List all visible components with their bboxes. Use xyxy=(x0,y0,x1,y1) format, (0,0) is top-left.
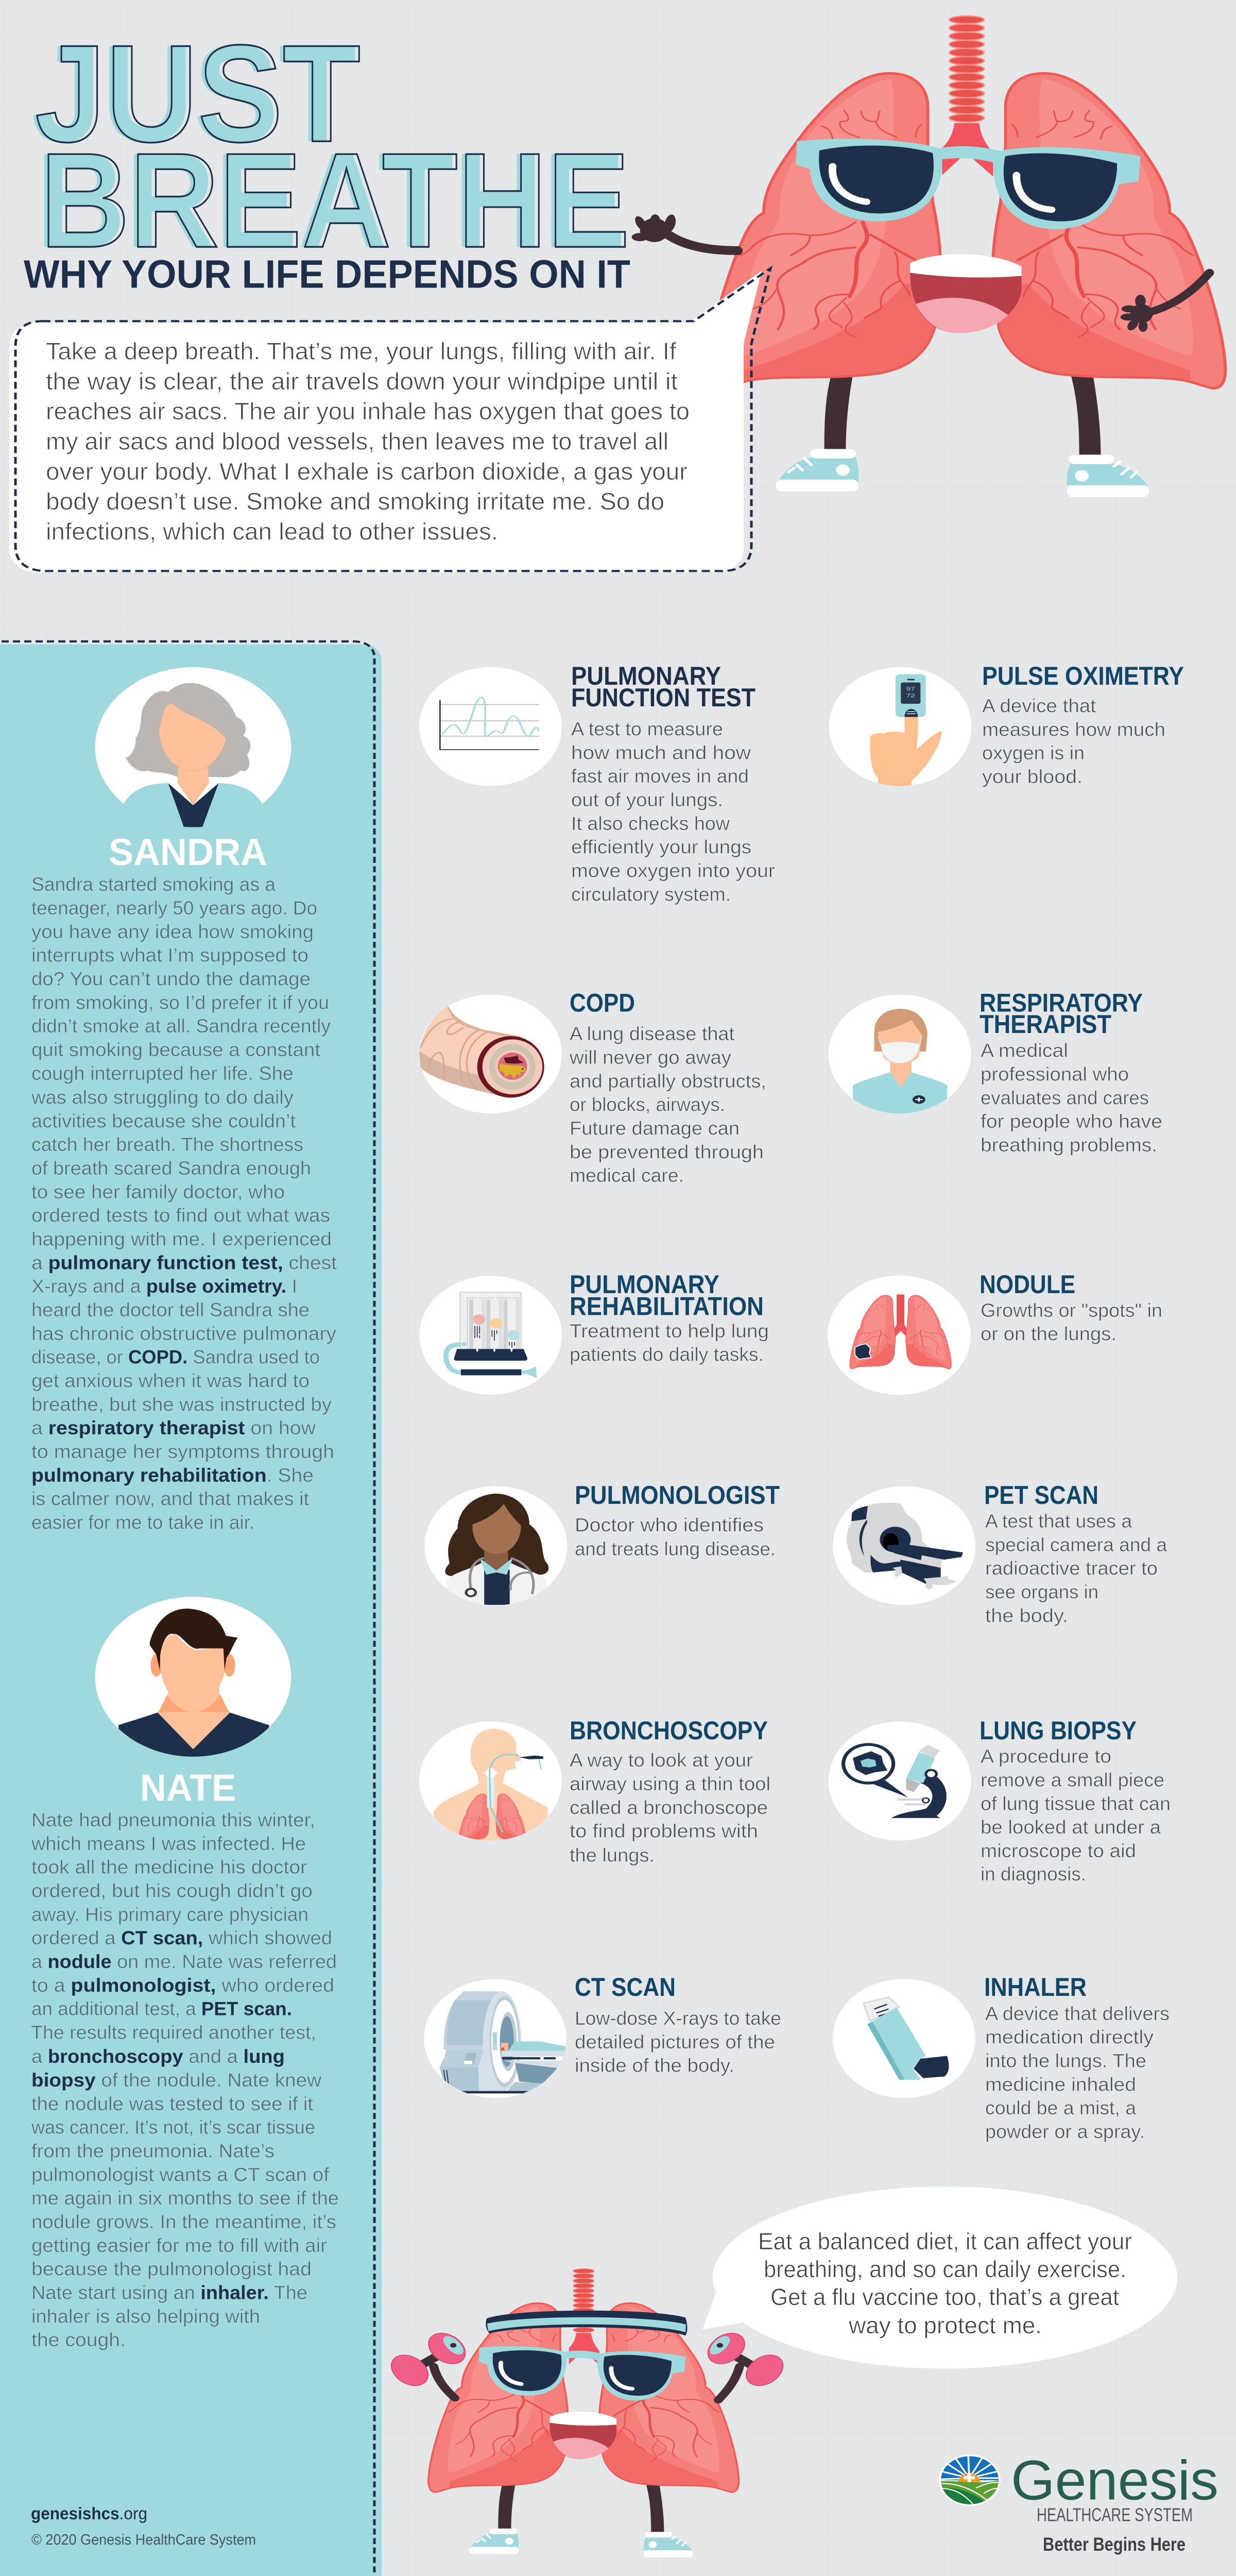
card: pulse oximetry: A device that xyxy=(982,695,1096,717)
callout: health advice speech bubble: Get a flu vaccine too, that’s a great xyxy=(770,2284,1119,2310)
card: pulmonary function test: PULMONARY xyxy=(571,662,721,690)
text block: Nate story: the nodule was tested to see if it xyxy=(31,2093,313,2114)
card: pulse oximetry xyxy=(829,662,1184,787)
text block: Sandra story: happening with me. I experienced xyxy=(31,1228,332,1250)
icon: finger pulse oximeter: 72 xyxy=(906,692,915,699)
icon: lungs with nodule xyxy=(828,1276,971,1395)
text block: Sandra story: disease, or COPD. Sandra used to xyxy=(31,1346,320,1368)
card: bronchoscopy: A way to look at your xyxy=(570,1750,753,1771)
text block: Nate story: inhaler is also helping with xyxy=(31,2306,260,2327)
card: inhaler: into the lungs. The xyxy=(985,2050,1146,2072)
icon: PET scanner xyxy=(833,1486,975,1605)
card: COPD: and partially obstructs, xyxy=(570,1070,766,1092)
text block: Sandra story: to see her family doctor, who xyxy=(31,1181,285,1202)
icon: finger pulse oximeter xyxy=(829,667,972,786)
card: COPD xyxy=(419,988,766,1186)
card: inhaler: INHALER xyxy=(984,1973,1087,2002)
card: inhaler: medicine inhaled xyxy=(985,2074,1136,2095)
card: lung biopsy: microscope to aid xyxy=(981,1840,1136,1861)
card: pulmonary function test: efficiently your lungs xyxy=(571,836,751,858)
heading: Sandra: SANDRA xyxy=(109,832,267,873)
card: nodule: NODULE xyxy=(980,1270,1075,1299)
panel: patient stories sidebar xyxy=(0,641,382,2576)
card: pulmonary rehabilitation: REHABILITATION xyxy=(570,1292,764,1320)
icon: incentive spirometer xyxy=(419,1276,562,1395)
card: COPD: medical care. xyxy=(570,1165,684,1186)
text block: Nate story: getting easier for me to fill with air xyxy=(31,2234,327,2256)
card: pulmonologist: Doctor who identifies xyxy=(575,1514,764,1536)
card: respiratory therapist: THERAPIST xyxy=(980,1010,1111,1039)
card: COPD: or blocks, airways. xyxy=(570,1094,725,1115)
title: Just Breathe: JUST xyxy=(31,16,356,171)
subtitle: WHY YOUR LIFE DEPENDS ON IT xyxy=(24,252,630,296)
card: lung biopsy: be looked at under a xyxy=(981,1817,1161,1838)
card: PET scan: see organs in xyxy=(985,1581,1098,1603)
text block: Sandra story: to manage her symptoms through xyxy=(31,1441,334,1462)
icon: masked therapist xyxy=(829,994,971,1117)
card: bronchoscopy: BRONCHOSCOPY xyxy=(570,1716,768,1745)
card: nodule xyxy=(828,1270,1162,1395)
text block: Nate story xyxy=(31,1809,339,2350)
icon: sun over green fields xyxy=(937,2454,1002,2507)
card: respiratory therapist xyxy=(829,988,1162,1156)
card: respiratory therapist: breathing problems. xyxy=(981,1134,1157,1156)
footer: website and copyright: © 2020 Genesis HealthCare System xyxy=(31,2532,256,2548)
text block: Nate story: to a pulmonologist, who ordered xyxy=(31,1974,334,1996)
card: CT scan: detailed pictures of the xyxy=(575,2031,775,2053)
dumbbells and arms xyxy=(384,2328,791,2400)
card: pulmonary rehabilitation: patients do daily tasks. xyxy=(570,1344,764,1365)
card: COPD: be prevented through xyxy=(570,1141,764,1162)
text block: Nate story: me again in six months to see if the xyxy=(31,2188,339,2209)
icon: lung function graph xyxy=(419,667,562,786)
card: pulmonary function test: fast air moves in and xyxy=(571,766,749,787)
icon: finger pulse oximeter: 97 xyxy=(906,686,915,692)
text block: Sandra story: catch her breath. The shortness xyxy=(31,1134,303,1155)
card: nodule: Growths or "spots" in xyxy=(981,1299,1162,1321)
text block: Sandra story: cough interrupted her life. She xyxy=(31,1062,294,1084)
text block: Sandra story: has chronic obstructive pulmonary xyxy=(31,1323,337,1344)
icon: microscope and tissue sample xyxy=(829,1721,971,1841)
text block: Nate story: the cough. xyxy=(31,2329,126,2350)
card: PET scan: the body. xyxy=(985,1605,1068,1626)
text block: Sandra story: get anxious when it was hard to xyxy=(31,1370,310,1392)
headband xyxy=(486,2311,687,2335)
text block: Sandra story: interrupts what I’m supposed to xyxy=(31,944,308,966)
card: bronchoscopy: called a bronchoscope xyxy=(570,1797,768,1818)
card: pulmonologist xyxy=(424,1481,780,1605)
text block: Sandra story: from smoking, so I’d prefer it if you xyxy=(31,992,329,1013)
callout: health advice speech bubble xyxy=(702,2187,1177,2369)
callout: health advice speech bubble: way to protect me. xyxy=(848,2312,1042,2338)
text block: Nate story: biopsy of the nodule. Nate knew xyxy=(31,2070,322,2091)
text block: Nate story: which means I was infected. He xyxy=(31,1833,306,1854)
portrait: Nate xyxy=(95,1597,291,1758)
text block: Sandra story: activities because she couldn’t xyxy=(31,1110,296,1131)
card: inhaler: could be a mist, a xyxy=(985,2097,1136,2119)
card: pulse oximetry: measures how much xyxy=(982,719,1165,740)
speech bubble: intro: reaches air sacs. The air you inhale has oxygen that goes to xyxy=(46,398,690,425)
card: pulmonary rehabilitation xyxy=(419,1270,769,1395)
text block: Sandra story: quit smoking because a constant xyxy=(31,1039,320,1060)
card: respiratory therapist: professional who xyxy=(981,1063,1129,1085)
card: pulmonary function test: move oxygen into your xyxy=(571,860,775,882)
callout: health advice speech bubble: Eat a balanced diet, it can affect your xyxy=(758,2228,1132,2255)
card: pulmonary function test: FUNCTION TEST xyxy=(571,683,756,712)
title: Just Breathe: BREATHE xyxy=(36,125,626,276)
card: COPD: A lung disease that xyxy=(570,1023,734,1044)
title: Just Breathe xyxy=(31,16,630,276)
card: PET scan: PET SCAN xyxy=(984,1481,1098,1510)
card: PET scan: A test that uses a xyxy=(985,1511,1132,1532)
speech bubble: intro: body doesn’t use. Smoke and smoking irritate me. So do xyxy=(46,488,664,515)
logo: Genesis HealthCare System xyxy=(937,2450,1218,2555)
text block: Sandra story: ordered tests to find out what was xyxy=(31,1205,330,1226)
text block: Nate story: took all the medicine his doctor xyxy=(31,1856,307,1878)
speech bubble: intro: infections, which can lead to other issues. xyxy=(46,518,498,545)
footer: website and copyright: genesishcs.org xyxy=(31,2504,147,2523)
card: lung biopsy: of lung tissue that can xyxy=(981,1793,1171,1814)
card: inhaler xyxy=(833,1973,1170,2142)
callout: health advice speech bubble: breathing, and so can daily exercise. xyxy=(764,2256,1126,2282)
lungs character with sunglasses xyxy=(632,16,1225,497)
card: PET scan: special camera and a xyxy=(985,1534,1167,1555)
card: pulmonary function test: circulatory system. xyxy=(571,884,731,905)
card: pulmonary function test: A test to measure xyxy=(571,718,723,740)
text block: Nate story: an additional test, a PET scan. xyxy=(31,1998,292,2020)
icon: bronchoscope in airway xyxy=(419,1721,562,1841)
text block: Nate story: pulmonologist wants a CT scan of xyxy=(31,2164,330,2185)
text block: Nate story: nodule grows. In the meantime, it’s xyxy=(31,2211,336,2232)
text block: Nate story: ordered, but his cough didn’t go xyxy=(31,1880,313,1902)
card: inhaler: medication directly xyxy=(985,2026,1154,2048)
portrait: Sandra xyxy=(95,667,291,831)
card: bronchoscopy xyxy=(419,1716,770,1866)
text block: Sandra story xyxy=(31,874,337,1533)
card: pulmonary function test: how much and how xyxy=(571,742,751,763)
icon: inhaler xyxy=(833,1979,975,2098)
card: pulmonary rehabilitation: PULMONARY xyxy=(570,1270,719,1299)
card: pulmonologist: PULMONOLOGIST xyxy=(575,1481,780,1510)
card: pulse oximetry: your blood. xyxy=(982,766,1083,787)
card: COPD: COPD xyxy=(570,988,635,1017)
speech bubble: intro: over your body. What I exhale is carbon dioxide, a gas your xyxy=(46,457,688,485)
card: respiratory therapist: RESPIRATORY xyxy=(980,988,1143,1017)
card: lung biopsy: LUNG BIOPSY xyxy=(980,1716,1137,1745)
card: COPD: will never go away xyxy=(569,1047,732,1068)
card: nodule: or on the lungs. xyxy=(981,1323,1117,1345)
text block: Sandra story: you have any idea how smoking xyxy=(31,921,314,942)
icon: doctor with stethoscope xyxy=(424,1486,567,1605)
card: bronchoscopy: the lungs. xyxy=(570,1844,655,1866)
speech bubble: intro xyxy=(9,268,770,572)
text block: Sandra story: is calmer now, and that makes it xyxy=(31,1488,309,1510)
text block: Nate story: because the pulmonologist had xyxy=(31,2258,312,2280)
text block: Sandra story: of breath scared Sandra enough xyxy=(31,1158,311,1179)
speech bubble: intro: my air sacs and blood vessels, then leaves me to travel all xyxy=(46,428,668,454)
text block: Sandra story: teenager, nearly 50 years ago. Do xyxy=(31,897,317,919)
text block: Nate story: ordered a CT scan, which showed xyxy=(31,1927,332,1948)
card: lung biopsy xyxy=(829,1716,1171,1885)
card: CT scan: Low-dose X-rays to take xyxy=(575,2008,781,2029)
card: pulmonary function test xyxy=(419,662,775,905)
text block: Nate story: was cancer. It’s not, it’s scar tissue xyxy=(31,2116,315,2138)
card: respiratory therapist: A medical xyxy=(981,1040,1068,1061)
text block: Nate story: a nodule on me. Nate was referred xyxy=(31,1951,337,1972)
title: Just Breathe: BREATHE xyxy=(40,125,630,276)
text block: Nate story: Nate start using an inhaler. The xyxy=(31,2282,307,2303)
card: pulmonary function test: out of your lungs. xyxy=(571,789,723,810)
text block: Sandra story: Sandra started smoking as a xyxy=(31,874,276,895)
card: pulmonary function test: It also checks how xyxy=(571,812,730,834)
text block: Sandra story: breathe, but she was instructed by xyxy=(31,1394,332,1415)
card: CT scan: CT SCAN xyxy=(575,1973,676,2002)
icon: obstructed airway cross-section xyxy=(419,995,562,1113)
text block: Sandra story: a pulmonary function test, chest xyxy=(31,1252,337,1273)
text block: Sandra story: didn’t smoke at all. Sandra recently xyxy=(31,1015,331,1037)
text block: Nate story: Nate had pneumonia this winter, xyxy=(31,1809,315,1831)
text block: Sandra story: was also struggling to do daily xyxy=(31,1087,294,1108)
card: pulmonologist: and treats lung disease. xyxy=(575,1538,776,1560)
card: lung biopsy: remove a small piece xyxy=(981,1769,1164,1791)
text block: Nate story: from the pneumonia. Nate’s xyxy=(31,2140,274,2162)
text block: Sandra story: easier for me to take in air. xyxy=(31,1512,254,1533)
card: PET scan: radioactive tracer to xyxy=(985,1557,1158,1579)
card: respiratory therapist: evaluates and cares xyxy=(981,1087,1149,1108)
icon: CT scanner xyxy=(424,1979,566,2098)
speech bubble: intro: the way is clear, the air travels down your windpipe until it xyxy=(46,367,678,395)
left waving arm xyxy=(632,214,737,250)
card: pulmonary rehabilitation: Treatment to help lung xyxy=(570,1320,769,1342)
exercising lungs character xyxy=(384,2269,791,2557)
card: lung biopsy: A procedure to xyxy=(981,1745,1111,1767)
card: lung biopsy: in diagnosis. xyxy=(981,1863,1086,1885)
card: inhaler: A device that delivers xyxy=(985,2003,1170,2024)
text block: Sandra story: pulmonary rehabilitation. She xyxy=(31,1464,314,1486)
card: CT scan: inside of the body. xyxy=(575,2055,734,2076)
footer: website and copyright xyxy=(31,2504,256,2548)
card: bronchoscopy: to find problems with xyxy=(570,1820,758,1842)
text block: Sandra story: heard the doctor tell Sandra she xyxy=(31,1299,310,1320)
card: respiratory therapist: for people who have xyxy=(981,1111,1162,1132)
title: Just Breathe: JUST xyxy=(35,16,360,171)
heading: Nate: NATE xyxy=(140,1767,236,1809)
text block: Sandra story: X-rays and a pulse oximetry. I xyxy=(31,1276,297,1297)
speech bubble: intro: Take a deep breath. That’s me, your lungs, filling with air. If xyxy=(46,337,677,364)
card: bronchoscopy: airway using a thin tool xyxy=(570,1773,770,1794)
text block: Nate story: The results required another test, xyxy=(31,2022,316,2043)
card: inhaler: powder or a spray. xyxy=(985,2121,1145,2142)
text block: Sandra story: a respiratory therapist on how xyxy=(31,1417,316,1438)
text block: Sandra story: do? You can’t undo the damage xyxy=(31,968,311,990)
card: pulse oximetry: oxygen is in xyxy=(982,742,1085,764)
card: CT scan xyxy=(424,1973,781,2098)
text block: Nate story: away. His primary care physician xyxy=(31,1904,308,1925)
right waving arm xyxy=(1121,273,1210,332)
text block: Nate story: a bronchoscopy and a lung xyxy=(31,2046,285,2067)
card: COPD: Future damage can xyxy=(570,1117,740,1139)
card: PET scan xyxy=(833,1481,1167,1626)
